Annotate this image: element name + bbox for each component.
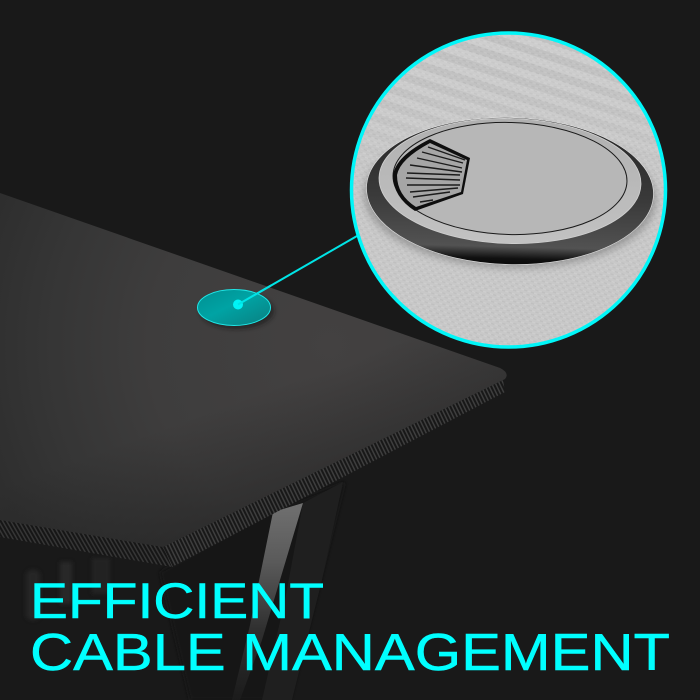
cable opening door bbox=[393, 139, 470, 211]
desk surface bbox=[0, 193, 507, 547]
connector line bbox=[238, 236, 357, 304]
door ribs bbox=[406, 147, 465, 202]
cable mechanism under desk bbox=[26, 558, 110, 620]
desk top bbox=[0, 193, 507, 567]
silver plate bbox=[377, 115, 643, 247]
marker line overlay bbox=[238, 286, 271, 304]
title bbox=[30, 573, 670, 682]
desk leg bbox=[160, 482, 345, 700]
hotspot marker bbox=[198, 286, 274, 329]
desk front edge bbox=[0, 380, 505, 567]
lens cyan border bbox=[352, 33, 666, 347]
carbon fibre texture bbox=[354, 35, 664, 344]
marker dot bbox=[233, 300, 243, 310]
grommet bbox=[362, 114, 658, 272]
magnified detail circle bbox=[350, 31, 668, 349]
grommet shadow bbox=[362, 122, 658, 272]
inner lid bbox=[392, 119, 628, 238]
title line 1: EFFICIENT bbox=[30, 573, 324, 629]
title line 2: CABLE MANAGEMENT bbox=[30, 624, 670, 682]
marker disc bbox=[198, 290, 270, 326]
marker shadow bbox=[200, 293, 274, 329]
outer black ring bbox=[365, 114, 655, 268]
